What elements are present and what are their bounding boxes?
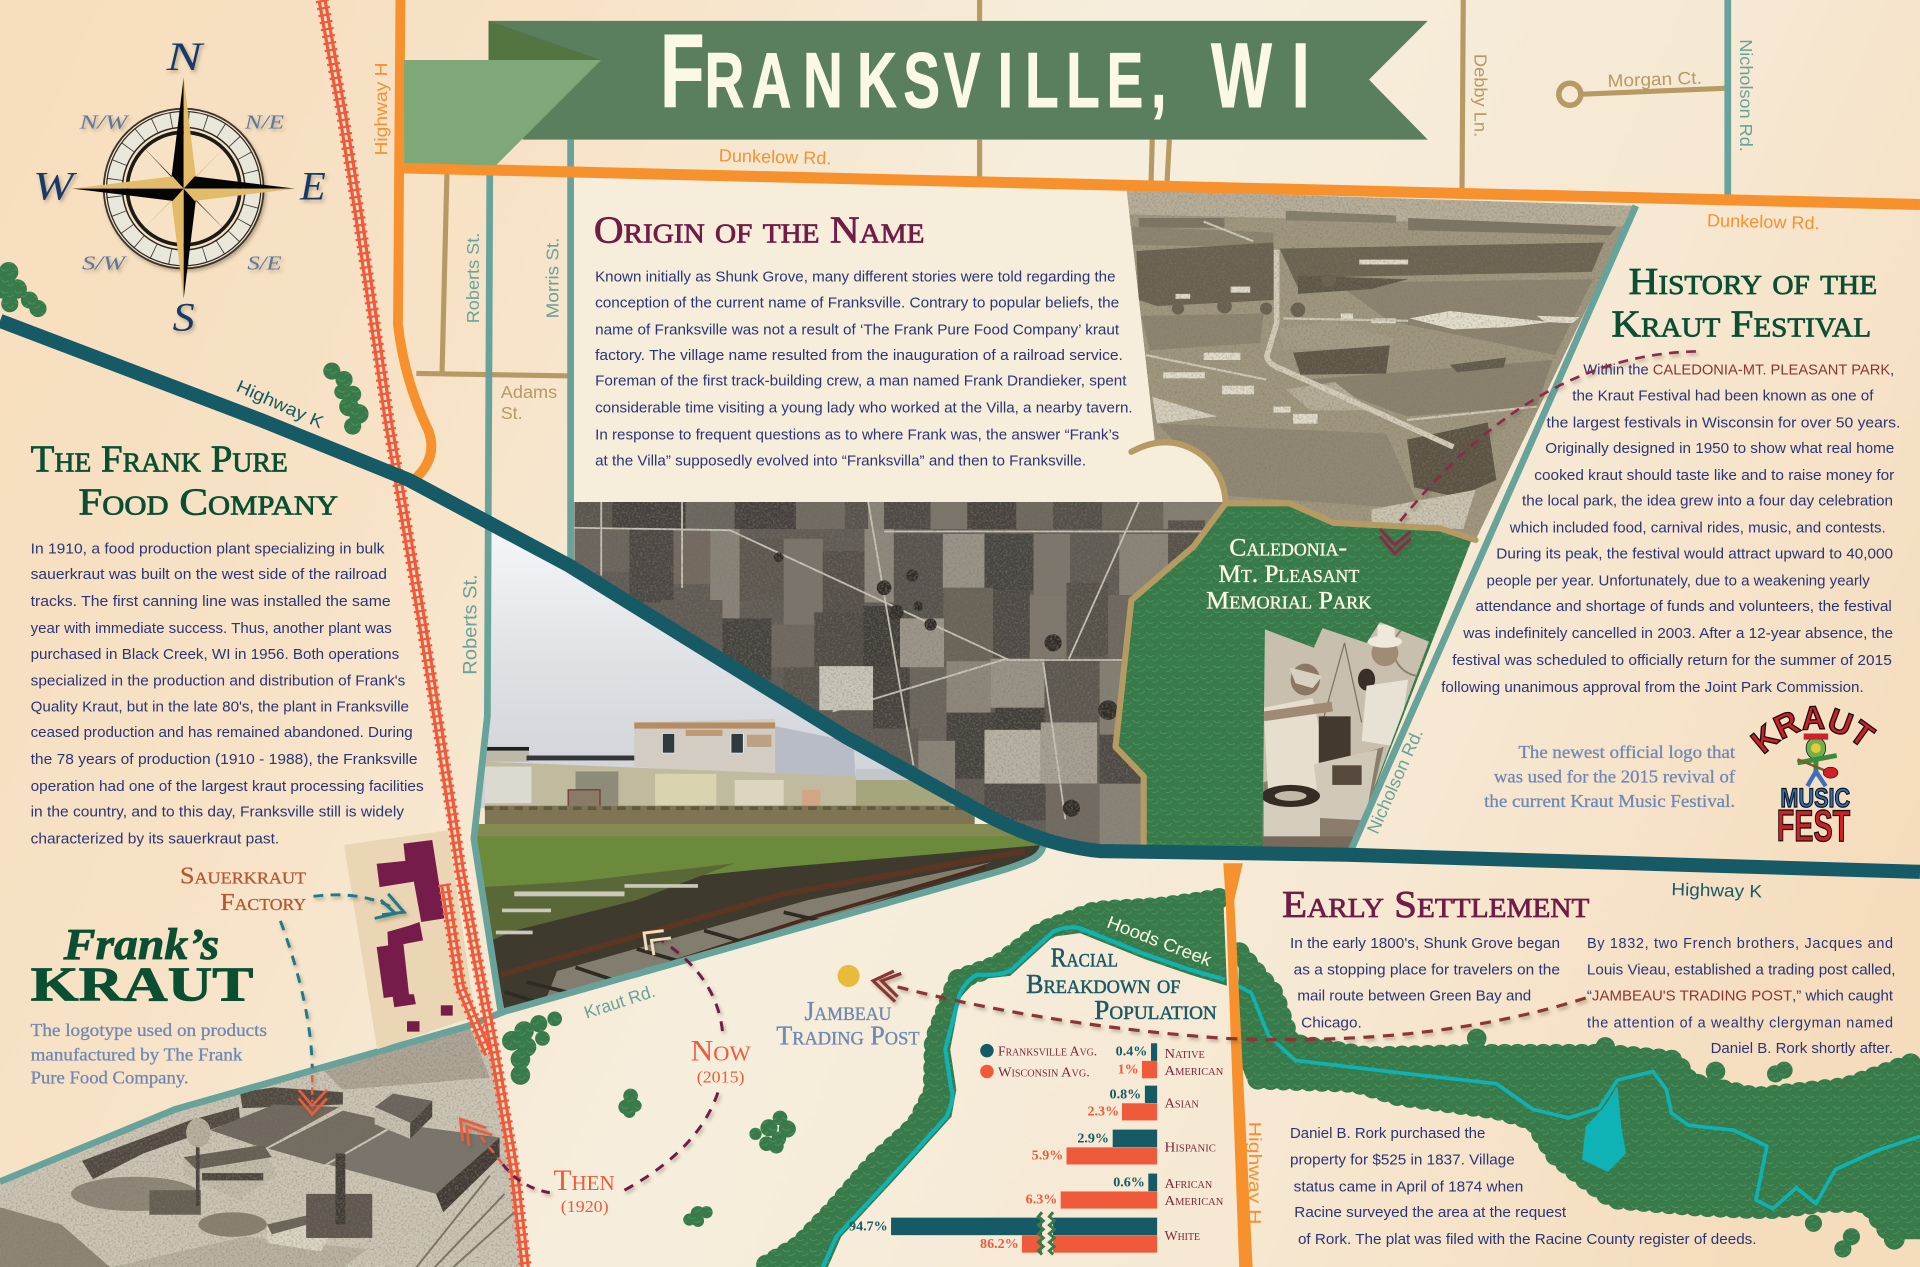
body text: Daniel B. Rork purchased the <box>1290 1126 1485 1142</box>
body text: mail route between Green Bay and <box>1297 988 1531 1004</box>
body text: cooked kraut should taste like and to raise money for <box>1534 468 1894 484</box>
arrow: label to plant photo <box>280 921 327 1114</box>
compass letters: W <box>33 164 77 209</box>
roads: tan streets <box>416 0 1728 376</box>
arrow: Now dashed arc <box>624 931 722 1190</box>
heading <box>1611 261 1877 346</box>
arrow: park dashed line <box>1380 351 1696 553</box>
body text: considerable time visiting a young lady who worked at the Villa, a nearby tavern. <box>595 401 1133 417</box>
heading <box>31 438 338 523</box>
value labels: 0.6% <box>1113 1175 1145 1191</box>
body text: In the early 1800's, Shunk Grove began <box>1290 936 1560 952</box>
body text: Racine surveyed the area at the request <box>1294 1205 1566 1221</box>
value labels: 1% <box>1118 1061 1139 1077</box>
street labels <box>233 39 1820 1225</box>
road: Dunkelow Rd <box>398 168 1920 205</box>
compass letters: N <box>165 34 205 79</box>
body text: attendance and shortage of funds and volunteers, the festival <box>1476 599 1892 615</box>
body text: property for $525 in 1837. Village <box>1290 1153 1515 1169</box>
title: F <box>660 14 705 130</box>
category labels: Asian <box>1164 1096 1199 1112</box>
street labels: Highway K <box>1671 879 1762 902</box>
label: Now <box>691 1035 751 1086</box>
label: Then <box>553 1165 615 1216</box>
body text: was indefinitely cancelled in 2003. After a 12-year absence, the <box>1462 626 1893 642</box>
panel: Racial Breakdown of Population <box>849 943 1223 1258</box>
road: park tan border <box>1116 442 1476 851</box>
heading: Origin of the Name <box>594 209 924 251</box>
panel: History of the Kraut Festival <box>1441 261 1900 811</box>
photo: mid-century aerial of farmland <box>569 496 1231 857</box>
body text: as a stopping place for travelers on the <box>1294 963 1560 979</box>
street labels: Dunkelow Rd. <box>1707 210 1820 233</box>
body text: Daniel B. Rork shortly after. <box>1711 1041 1893 1057</box>
marker: Jambeau Trading Post <box>838 965 860 987</box>
forest and creek right band <box>1233 953 1920 1239</box>
legend: Franksville Avg. <box>998 1044 1097 1060</box>
arrow: trading post dashed line <box>873 971 1586 1040</box>
factory site plan <box>344 830 475 1049</box>
photo: festival cooks <box>1262 622 1429 848</box>
label: Now: (2015) <box>697 1067 744 1086</box>
photo: abandoned sauerkraut plant and rail tracks <box>471 514 1047 1016</box>
body text: Known initially as Shunk Grove, many different stories were told regarding the <box>595 270 1116 286</box>
body text: people per year. Unfortunately, due to a weakening yearly <box>1487 573 1871 589</box>
panel: Origin of the Name <box>594 209 1133 469</box>
body text: Quality Kraut, but in the late 80's, the plant in Franksville <box>31 699 409 715</box>
body text <box>31 541 424 848</box>
body text: Foreman of the first track-building crew, a man named Frank Drandieker, spent <box>595 374 1127 390</box>
heading: Racial <box>1051 943 1118 973</box>
panel: origin of the name backdrop <box>571 175 1227 502</box>
value labels: 86.2% <box>980 1236 1019 1252</box>
body text: the 78 years of production (1910 - 1988), the Franksville <box>31 752 418 768</box>
body text: operation had one of the largest kraut processing facilities <box>31 779 424 795</box>
sauerkraut factory label: Factory <box>220 889 306 916</box>
body text: Originally designed in 1950 to show what real home <box>1545 441 1894 457</box>
legend: Wisconsin Avg. <box>998 1064 1090 1080</box>
street labels: Kraut Rd. <box>582 981 658 1023</box>
road: Highway K <box>0 321 1920 872</box>
sauerkraut factory label: Sauerkraut <box>180 862 307 889</box>
heading: Kraut Festival <box>1611 304 1871 346</box>
body text: “JAMBEAU'S TRADING POST ,” which caught <box>1587 988 1893 1004</box>
panel: Early Settlement <box>1282 884 1896 1248</box>
title banner <box>404 14 1428 165</box>
logo: Kraut Music Fest: KRAUT <box>1749 706 1878 754</box>
value labels: 5.9% <box>1032 1148 1063 1164</box>
compass rose <box>33 34 326 340</box>
street labels: Morris St. <box>542 238 562 318</box>
street labels: Roberts St. <box>463 233 483 323</box>
category labels <box>1164 1046 1223 1244</box>
logo: Kraut Music Fest: FEST <box>1777 802 1850 851</box>
body text: In response to frequent questions as to where Frank was, the answer “Frank’s <box>595 428 1119 444</box>
logo: Kraut Music Fest <box>1749 706 1878 851</box>
street labels: Highway H <box>1245 1122 1265 1225</box>
body text: Louis Vieau, established a trading post called, <box>1587 963 1896 979</box>
street labels: Debby Ln. <box>1470 54 1490 137</box>
street labels: Highway H <box>371 62 391 156</box>
body text: the attention of a wealthy clergyman named <box>1587 1015 1893 1031</box>
panel: The Frank Pure Food Company <box>31 438 424 848</box>
category labels: American <box>1164 1193 1223 1209</box>
body text: the local park, the idea grew into a four day celebration <box>1522 494 1893 510</box>
photo: 1950s aerial of town <box>1120 184 1647 545</box>
park label: Caledonia- <box>1229 532 1347 561</box>
road: Highway H north <box>398 0 431 480</box>
body text: following unanimous approval from the Joint Park Commission. <box>1441 680 1864 696</box>
sauerkraut factory label <box>180 862 307 916</box>
heading: Food Company <box>78 481 338 523</box>
logo caption: was used for the 2015 revival of <box>1494 766 1736 786</box>
body text: name of Franksville was not a result of ‘The Frank Pure Food Company’ kraut <box>595 322 1119 338</box>
body text: in the country, and to this day, Franksville still is widely <box>31 805 405 821</box>
logo: Kraut Music Fest: MUSIC <box>1780 783 1850 813</box>
body text: purchased in Black Creek, WI in 1956. Both operations <box>31 647 399 663</box>
compass letters: N/E <box>244 112 284 134</box>
category labels: African <box>1164 1176 1212 1192</box>
logotype caption: Pure Food Company. <box>31 1068 189 1088</box>
value labels: 2.3% <box>1087 1104 1119 1120</box>
compass letters <box>33 34 326 340</box>
icon: Morgan Ct. cul-de-sac <box>1559 83 1581 105</box>
arrow: Then dashed arc <box>460 1119 550 1193</box>
tree clusters <box>0 262 1860 1258</box>
body text: sauerkraut was built on the west side of the railroad <box>31 567 387 583</box>
street labels: St. <box>501 403 523 423</box>
axis break <box>1038 1212 1054 1258</box>
category labels: Native <box>1164 1046 1205 1062</box>
body text: In 1910, a food production plant specializing in bulk <box>31 541 385 557</box>
value labels <box>849 1044 1147 1252</box>
body text: tracks. The first canning line was installed the same <box>31 594 391 610</box>
logotype caption: manufactured by The Frank <box>31 1044 243 1064</box>
title: RANKSVILLE, <box>705 38 1190 124</box>
heading: Early Settlement <box>1282 884 1590 926</box>
label: Jambeau Trading Post: Jambeau <box>804 996 892 1026</box>
street labels: Morgan Ct. <box>1607 68 1702 91</box>
value labels: 0.4% <box>1116 1044 1147 1060</box>
label: Then: Then <box>553 1165 615 1197</box>
compass letters: N/W <box>78 112 130 134</box>
lake <box>1582 1086 1626 1172</box>
category labels: Hispanic <box>1164 1140 1216 1156</box>
street labels: Adams <box>501 382 557 402</box>
logo: Frank's Kraut: Frank’s <box>63 920 219 969</box>
railroad <box>322 0 525 1267</box>
compass letters: E <box>299 164 326 209</box>
heading <box>1026 943 1217 1025</box>
compass letters: S/E <box>247 252 282 274</box>
category labels: American <box>1164 1063 1223 1079</box>
heading: History of the <box>1629 261 1877 303</box>
body text: year with immediate success. Thus, another plant was <box>31 621 392 637</box>
park label: Mt. Pleasant <box>1218 559 1359 588</box>
body text: ceased production and has remained abandoned. During <box>31 725 413 741</box>
street labels: Highway K <box>233 376 327 432</box>
road: Highway H south <box>1223 863 1253 1267</box>
body text: By 1832, two French brothers, Jacques and <box>1587 936 1893 952</box>
label: Jambeau Trading Post: Trading Post <box>776 1020 920 1050</box>
forest and Hoods Creek left band <box>760 898 1227 1267</box>
body text: Chicago. <box>1301 1015 1362 1031</box>
body text: at the Villa” supposedly evolved into “Franksvilla” and then to Franksville. <box>595 453 1086 469</box>
heading: Population <box>1094 995 1217 1025</box>
body text: Within the CALEDONIA-MT. PLEASANT PARK , <box>1583 363 1894 379</box>
body text: of Rork. The plat was filed with the Racine County register of deeds. <box>1298 1232 1757 1248</box>
street labels: Nicholson Rd. <box>1363 726 1427 837</box>
body text: specialized in the production and distribution of Frank's <box>31 674 405 690</box>
compass letters: S <box>173 295 195 340</box>
logo caption: the current Kraut Music Festival. <box>1484 791 1735 811</box>
street labels: Dunkelow Rd. <box>719 145 832 168</box>
body text: factory. The village name resulted from the inauguration of a railroad service. <box>595 348 1123 364</box>
body text: which included food, carnival rides, music, and contests. <box>1509 521 1886 537</box>
label: Now: Now <box>691 1035 751 1067</box>
body text: the largest festivals in Wisconsin for over 50 years. <box>1547 415 1900 431</box>
map park: Caledonia-Mt. Pleasant Memorial Park <box>1116 503 1473 857</box>
value labels: 0.8% <box>1110 1086 1141 1102</box>
compass letters: S/W <box>82 252 128 274</box>
body text <box>595 270 1133 469</box>
photo: Frank Pure Food Company plant 1920 <box>0 1016 539 1267</box>
body text: the Kraut Festival had been known as one of <box>1572 388 1875 404</box>
park label <box>1206 532 1371 615</box>
heading: Breakdown of <box>1026 969 1180 999</box>
legend <box>980 1044 1097 1080</box>
label: Jambeau Trading Post <box>776 996 920 1050</box>
value labels: 2.9% <box>1077 1130 1109 1146</box>
category labels: White <box>1164 1228 1200 1244</box>
logo: Frank's Kraut: KRAUT <box>31 956 253 1011</box>
body text: characterized by its sauerkraut past. <box>31 832 279 848</box>
park label: Memorial Park <box>1206 586 1371 615</box>
logotype caption: The logotype used on products <box>31 1020 267 1040</box>
street labels: Roberts St. <box>460 574 481 675</box>
street labels: Hoods Creek <box>1104 912 1214 970</box>
label: Then: (1920) <box>561 1197 609 1216</box>
logo caption: The newest official logo that <box>1518 742 1735 762</box>
value labels: 94.7% <box>849 1219 888 1235</box>
logo: Frank's Kraut <box>31 920 253 1011</box>
body text: festival was scheduled to officially return for the summer of 2015 <box>1452 653 1892 669</box>
street labels: Nicholson Rd. <box>1736 39 1756 152</box>
body text: conception of the current name of Franksville. Contrary to popular beliefs, the <box>595 295 1119 311</box>
body text: status came in April of 1874 when <box>1294 1179 1523 1195</box>
bar chart <box>849 1043 1223 1258</box>
title: WI <box>1211 24 1310 127</box>
body text: During its peak, the festival would attract upward to 40,000 <box>1496 546 1893 562</box>
logotype caption <box>31 1020 267 1088</box>
logo caption <box>1484 742 1736 811</box>
heading: The Frank Pure <box>31 438 288 480</box>
body text <box>1290 936 1896 1248</box>
body text <box>1441 363 1900 696</box>
value labels: 6.3% <box>1026 1192 1057 1208</box>
arrow: label to factory site <box>313 894 404 918</box>
